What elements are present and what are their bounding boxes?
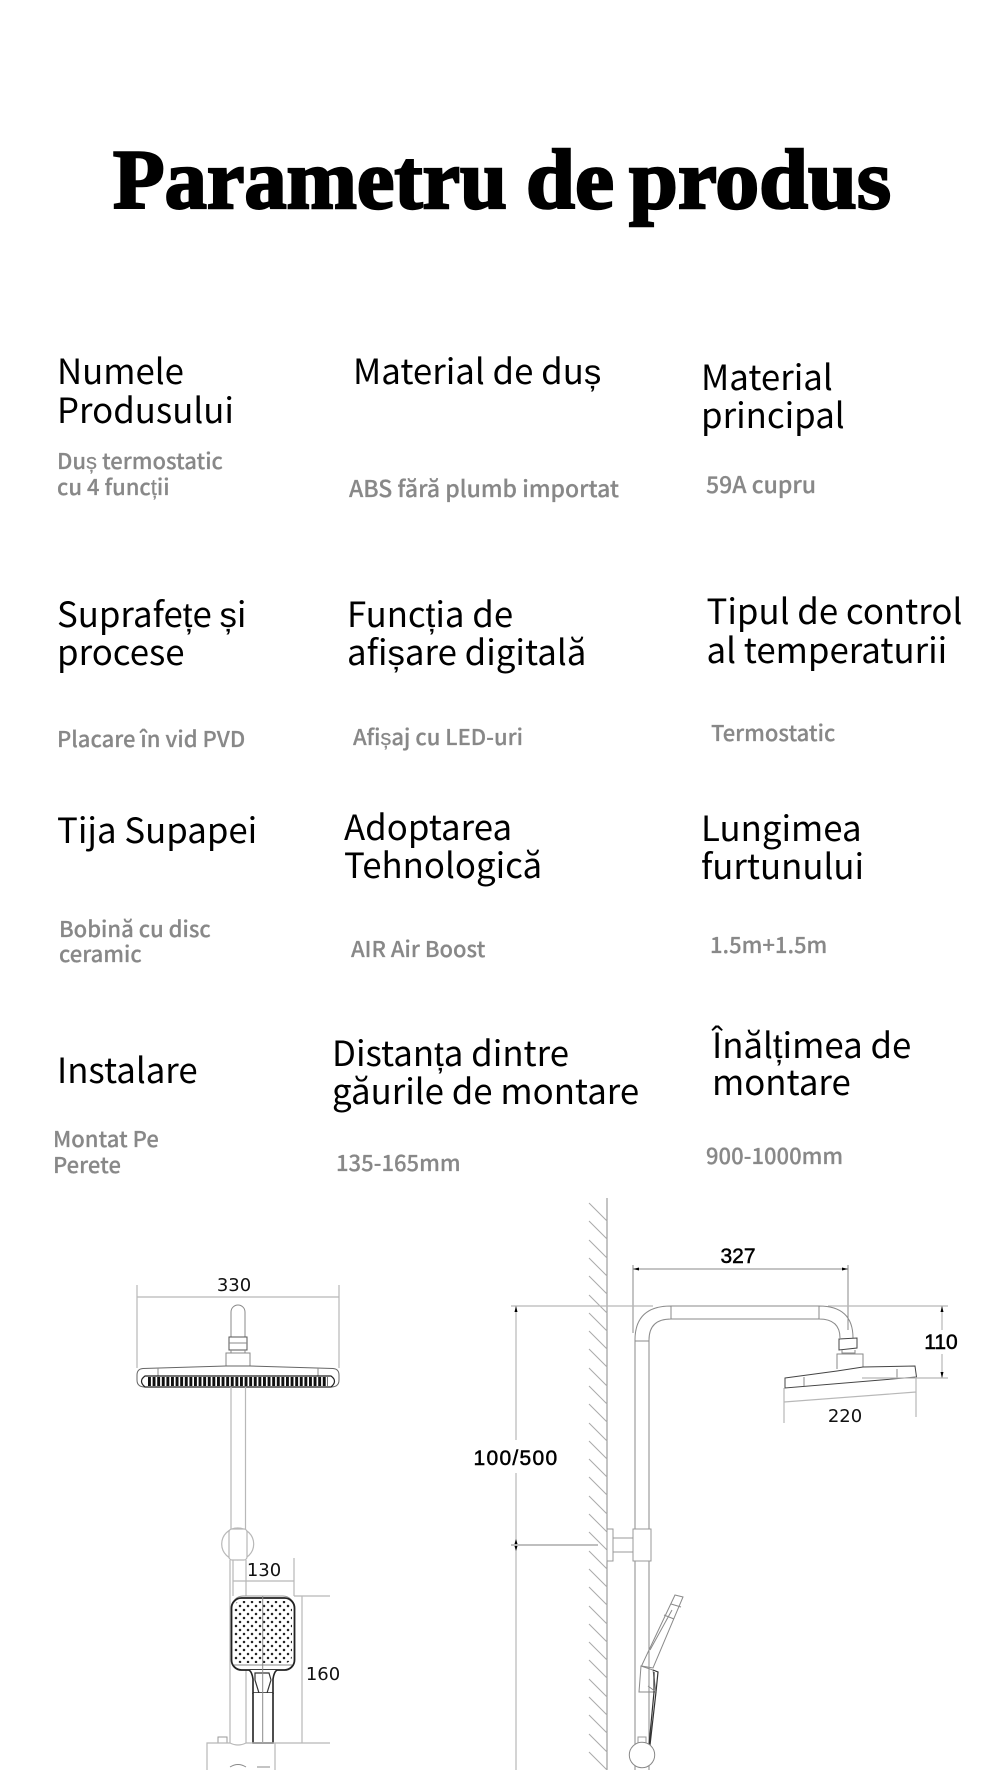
- hand shower: [232, 1596, 294, 1743]
- diagram: front view: [137, 1275, 340, 1770]
- parameter: temperature control: Tipul de control: [706, 585, 962, 635]
- parameter: technology: [344, 801, 542, 964]
- parameter: product name: Numele: [57, 345, 184, 395]
- parameter: product name: Produsului: [57, 384, 234, 434]
- parameter: hose length: Lungimea: [701, 802, 862, 852]
- dimension: arm length 327: [633, 1245, 848, 1333]
- rain shower head: [137, 1366, 339, 1387]
- title: Parametru: [113, 133, 507, 227]
- parameter: valve stem: [57, 804, 257, 969]
- parameter: main material: principal: [701, 389, 845, 439]
- parameter: hole distance: [332, 1027, 639, 1178]
- parameter: shower material: [349, 345, 619, 504]
- parameter: installation: Montat Pe: [53, 1122, 159, 1154]
- parameter: surface process: [57, 588, 246, 754]
- parameter: hole distance: 135-165mm: [336, 1146, 461, 1178]
- title: [113, 133, 891, 227]
- dimension: offset 110: 110: [924, 1331, 958, 1354]
- parameter: temperature control: Termostatic: [711, 716, 835, 748]
- parameter: shower material: ABS fără plumb importat: [349, 470, 619, 504]
- parameter: shower material: Material de duș: [353, 345, 601, 395]
- parameter: installation: Perete: [53, 1148, 121, 1180]
- parameter: hole distance: găurile de montare: [332, 1065, 639, 1115]
- dimension: head width 330: 330: [217, 1275, 251, 1296]
- parameter: digital display: [347, 588, 586, 752]
- parameter: mounting height: montare: [712, 1056, 851, 1106]
- dimension: head width 330: [137, 1275, 339, 1368]
- title: de: [526, 133, 614, 227]
- parameter: valve stem: Bobină cu disc: [59, 912, 211, 944]
- dimension: offset 110: [862, 1306, 958, 1378]
- parameter: installation: Instalare: [57, 1044, 198, 1094]
- parameter: surface process: procese: [57, 626, 185, 676]
- parameter: valve stem: Tija Supapei: [57, 804, 257, 854]
- parameter: mounting height: 900-1000mm: [706, 1139, 843, 1171]
- parameter: temperature control: al temperaturii: [706, 624, 947, 674]
- parameter: surface process: Suprafețe și: [57, 588, 246, 638]
- parameter: hose length: [701, 802, 864, 960]
- parameter: mounting height: [706, 1019, 911, 1171]
- parameter: mounting height: Înălțimea de: [711, 1019, 911, 1069]
- parameter: hole distance: Distanța dintre: [332, 1027, 569, 1077]
- dimension: height 100/500: 100/500: [473, 1447, 559, 1470]
- wall outlet: [629, 1737, 655, 1768]
- diagram: side view: [473, 1198, 958, 1770]
- shower arm and rail: [635, 1306, 853, 1770]
- shower arm and connector: [226, 1305, 250, 1366]
- parameter: digital display: afișare digitală: [347, 626, 586, 676]
- vertical rail: [222, 1387, 254, 1743]
- dimension: hand shower width 130: 130: [247, 1560, 281, 1581]
- wall bracket: [607, 1529, 651, 1561]
- parameter: installation: [53, 1044, 198, 1180]
- parameter: valve stem: ceramic: [59, 937, 142, 969]
- parameter: product name: [57, 345, 234, 502]
- parameter: main material: Material: [701, 351, 833, 401]
- dimension: hand shower length 160: [275, 1596, 340, 1743]
- parameter: surface process: Placare în vid PVD: [57, 722, 245, 754]
- wall outlet box: [207, 1737, 275, 1770]
- parameter: digital display: Afișaj cu LED-uri: [353, 720, 523, 752]
- parameter: temperature control: [706, 585, 962, 748]
- side shower head: [785, 1338, 916, 1388]
- dimension: hand shower length 160: 160: [306, 1664, 340, 1685]
- parameter: product name: cu 4 funcții: [57, 470, 170, 502]
- side hand shower: [639, 1595, 683, 1745]
- parameter: digital display: Funcția de: [347, 588, 513, 638]
- parameter: product name: Duș termostatic: [57, 444, 223, 476]
- parameter: technology: Adoptarea: [344, 801, 512, 851]
- parameter: hose length: 1.5m+1.5m: [710, 928, 827, 960]
- parameter: hose length: furtunului: [701, 840, 864, 890]
- parameter: technology: Tehnologică: [344, 839, 542, 889]
- parameter: main material: 59A cupru: [706, 466, 816, 500]
- parameter: main material: [701, 351, 845, 500]
- dimension: hand shower width 130: [233, 1558, 294, 1596]
- title: produs: [629, 133, 891, 227]
- dimension: head width 220: [784, 1377, 916, 1427]
- parameter: technology: AIR Air Boost: [351, 932, 486, 964]
- wall with hatching: [589, 1198, 607, 1770]
- dimension: head width 220: 220: [828, 1406, 862, 1427]
- dimension: arm length 327: 327: [720, 1245, 756, 1268]
- dimension: height 100/500: [473, 1306, 948, 1770]
